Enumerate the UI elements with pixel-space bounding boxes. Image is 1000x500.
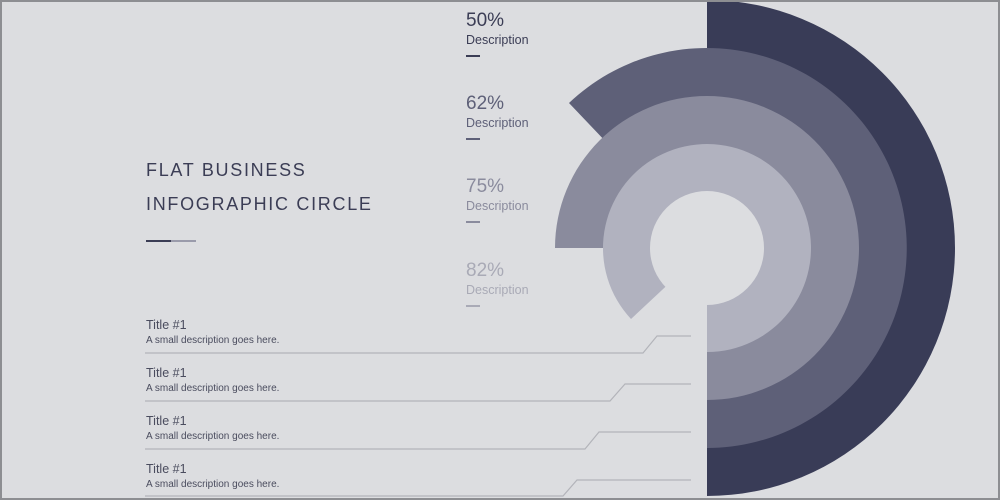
stat: 62%: 62% — [466, 93, 504, 114]
list item 1: Title #1 — [146, 318, 187, 332]
stat: 82%: 82% — [466, 260, 504, 281]
stat: 75% — [466, 176, 529, 223]
title — [146, 160, 373, 214]
ring 62% — [569, 48, 907, 448]
list item 3: Title #1 — [146, 414, 187, 428]
ring 82% — [603, 144, 811, 352]
stat: 82%: Description — [466, 283, 529, 297]
stat: 75%: Description — [466, 199, 529, 213]
list item 3: A small description goes here. — [146, 431, 279, 442]
stat: 75%: 75% — [466, 176, 504, 197]
list item 1: A small description goes here. — [146, 335, 279, 346]
ring 50% — [707, 0, 955, 496]
list item 4: Title #1 — [146, 462, 187, 476]
title underline accent — [146, 240, 196, 242]
list item 2 — [146, 366, 279, 394]
stat: 50% — [466, 10, 529, 57]
stat: 50%: Description — [466, 33, 529, 47]
title: INFOGRAPHIC CIRCLE — [146, 194, 373, 214]
list item 1 — [146, 318, 279, 346]
title: FLAT BUSINESS — [146, 160, 306, 180]
list item 2: Title #1 — [146, 366, 187, 380]
list item 2: A small description goes here. — [146, 383, 279, 394]
connector lines — [145, 336, 691, 496]
stat: 62%: Description — [466, 116, 529, 130]
stat: 82% — [466, 260, 529, 307]
ring 75% — [555, 96, 859, 400]
list item 4: A small description goes here. — [146, 479, 279, 490]
stat: 50%: 50% — [466, 10, 504, 31]
list item 3 — [146, 414, 279, 442]
list item 4 — [146, 462, 279, 490]
stat: 62% — [466, 93, 529, 140]
